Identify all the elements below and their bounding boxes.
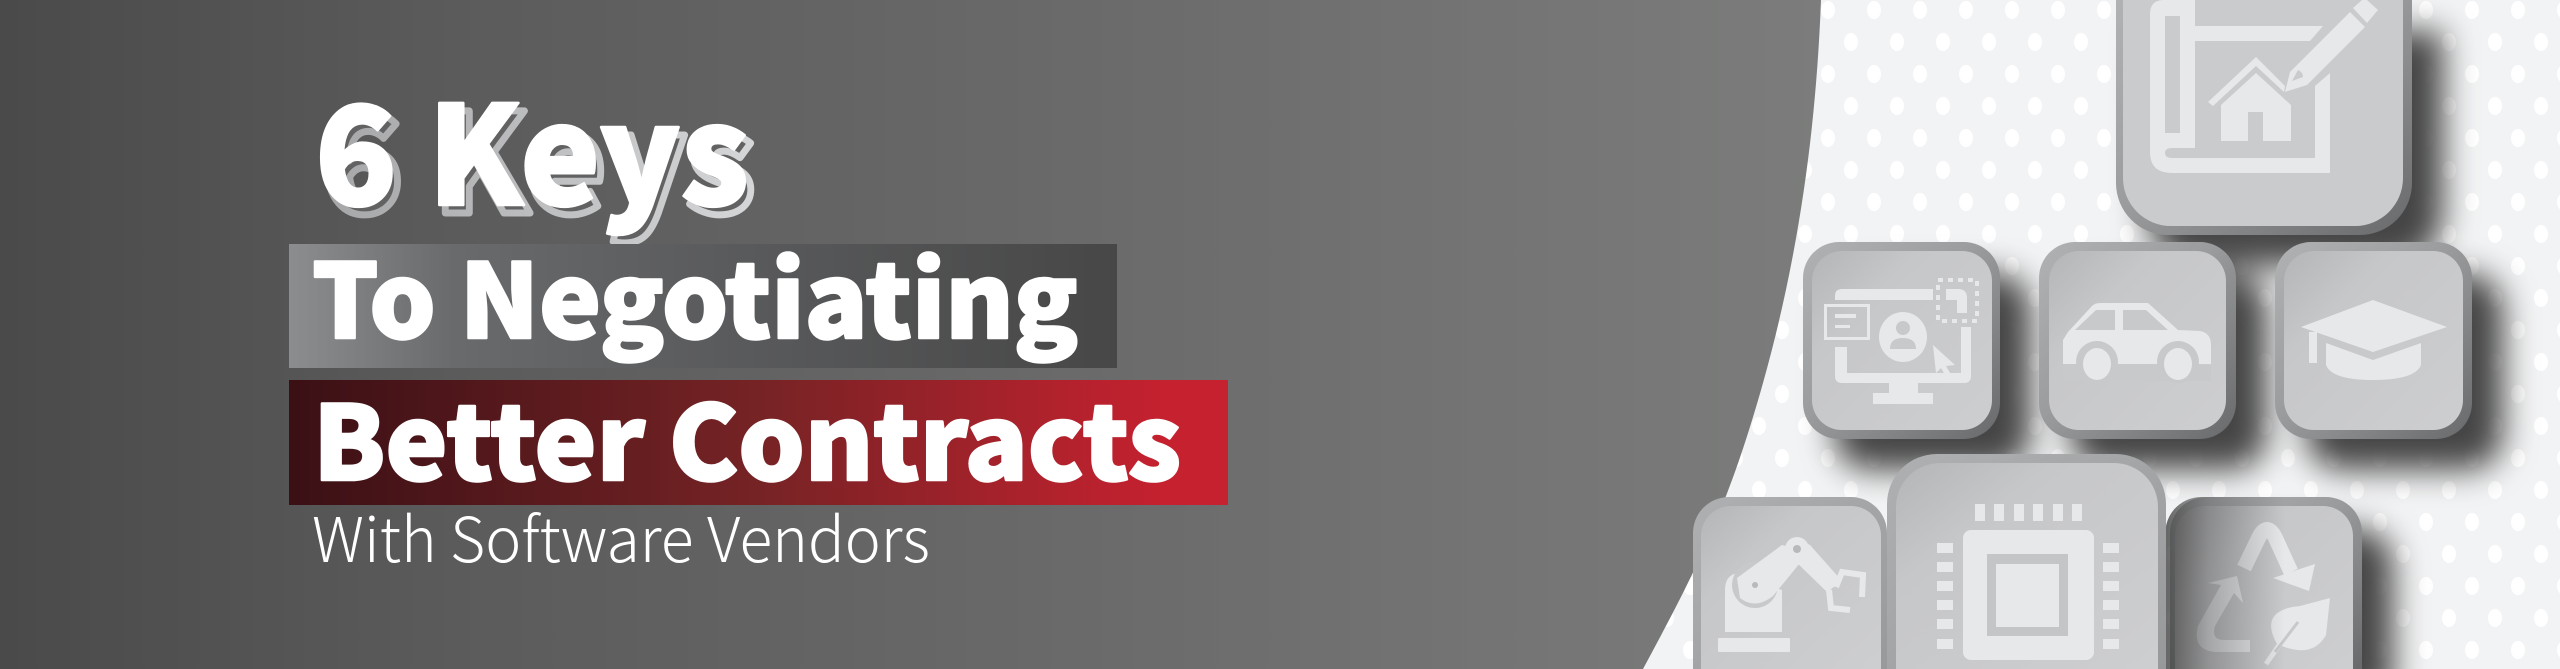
title: 6 Keys: 6 Keys xyxy=(315,47,749,245)
tile: processor chip xyxy=(1887,454,2166,669)
icon: chip xyxy=(1937,504,2119,660)
tile shadows xyxy=(1803,0,2472,669)
heading bar: To Negotiating: To Negotiating xyxy=(312,219,1078,368)
icon: car xyxy=(2063,303,2211,383)
dark curved panel xyxy=(0,0,1821,669)
tile: car xyxy=(2039,242,2236,439)
chip tile shadow on recycle tile xyxy=(2165,497,2290,669)
subtitle: With Software Vendors xyxy=(312,490,930,580)
title: 6 Keys: 6 Keys xyxy=(321,55,755,253)
heading bar: Better Contracts: Better Contracts xyxy=(313,361,1181,510)
icon: blueprint with house and pencil xyxy=(2150,0,2378,173)
tile: recycle leaf xyxy=(2165,497,2362,669)
tile: graduation cap xyxy=(2275,242,2472,439)
tile: blueprint house xyxy=(2116,0,2412,235)
icon: robot arm xyxy=(1718,537,1863,652)
icon: recycle with leaf xyxy=(2197,530,2330,664)
icon: graduation cap xyxy=(2301,300,2447,380)
tile: monitor xyxy=(1803,242,2000,439)
light dotted background xyxy=(1600,0,2560,669)
tile: robot arm xyxy=(1693,497,1887,669)
icon: monitor with profile xyxy=(1826,280,1977,404)
